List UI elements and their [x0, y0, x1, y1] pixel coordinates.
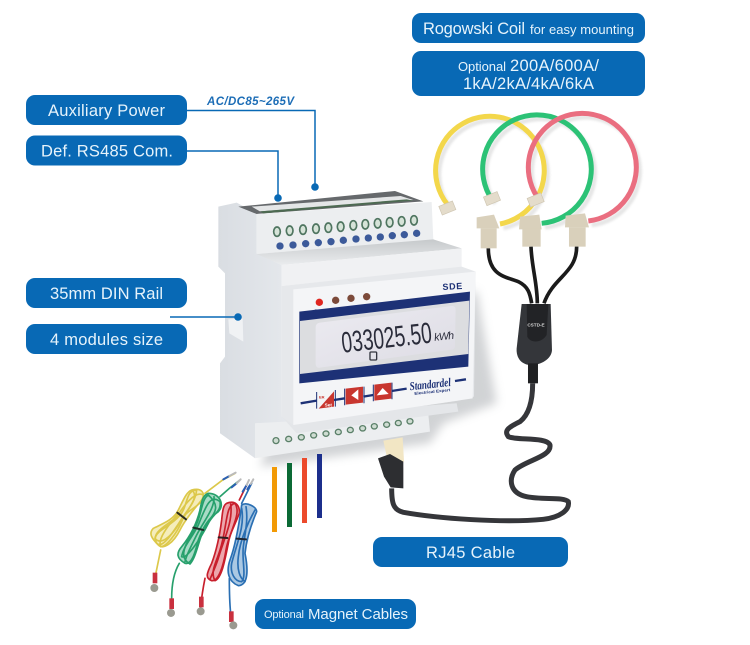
callout: rogowski coil: Rogowski Coil	[423, 20, 525, 38]
callout: din rail: 35mm DIN Rail	[50, 285, 163, 303]
integrator and rj45 cable: CSTD-E	[527, 323, 545, 328]
coil tips	[439, 192, 544, 215]
callout: magnet cables: Optional	[264, 609, 304, 621]
cable	[392, 383, 568, 521]
callout: coil ranges: 1kA/2kA/4kA/6kA	[463, 75, 594, 93]
callout: coil ranges: Optional	[458, 59, 506, 74]
rogowski coils	[436, 113, 640, 303]
upper step	[257, 239, 462, 265]
wire tips	[223, 473, 253, 492]
callout: rogowski coil	[412, 13, 645, 43]
din rail leader	[170, 313, 242, 321]
control buttons	[301, 379, 466, 409]
callout: coil ranges: 200A/600A/	[510, 57, 599, 75]
callout: rogowski coil: for easy mounting	[530, 22, 634, 37]
meter body	[218, 191, 497, 467]
signal leads	[488, 247, 577, 303]
led indicators	[315, 293, 373, 315]
signal wires	[272, 454, 322, 532]
control buttons: Set	[325, 403, 332, 408]
optional magnet cables	[150, 473, 257, 629]
yellow cable	[151, 473, 235, 573]
callout: rs485	[26, 136, 282, 202]
callout: rs485: Def. RS485 Com.	[41, 142, 173, 160]
lcd screen: kWh	[434, 330, 455, 344]
callout: coil ranges	[412, 51, 645, 96]
coil connectors	[477, 213, 589, 248]
callout: rj45 cable	[373, 537, 568, 567]
callout: auxiliary power	[26, 95, 319, 191]
front face	[282, 267, 476, 425]
green coil	[483, 115, 591, 223]
pink coil	[528, 113, 636, 221]
callout: magnet cables: Magnet Cables	[308, 606, 408, 623]
blue cable	[228, 483, 257, 613]
din rail clip	[228, 318, 243, 342]
top terminal block	[257, 202, 433, 254]
callout: module size	[26, 324, 187, 354]
lcd screen	[316, 306, 456, 368]
bottom terminal block	[255, 414, 430, 458]
voltage label: AC/DC85~265V	[206, 96, 295, 108]
callout: magnet cables	[255, 599, 416, 629]
terminal lugs	[150, 573, 237, 629]
navy display surround	[299, 292, 470, 383]
yellow coil	[436, 116, 544, 224]
callout: module size: 4 modules size	[50, 331, 163, 349]
lcd screen: 033025.50	[340, 317, 434, 360]
callout: din rail	[26, 278, 187, 308]
red cable	[201, 485, 247, 607]
green cable	[172, 480, 240, 598]
model label: SDE	[442, 281, 463, 292]
top terminal cover	[238, 191, 423, 214]
brand logo: Electrical Expert	[414, 387, 451, 396]
rj45 plug	[378, 437, 404, 488]
brand logo	[409, 375, 452, 396]
brand logo: Standardel	[409, 375, 452, 393]
housing side	[218, 203, 293, 458]
integrator and rj45 cable	[378, 304, 568, 521]
splitter	[517, 304, 552, 365]
callout: auxiliary power: Auxiliary Power	[48, 102, 166, 120]
control buttons: ER	[319, 394, 325, 399]
callout: rj45 cable: RJ45 Cable	[426, 544, 515, 562]
